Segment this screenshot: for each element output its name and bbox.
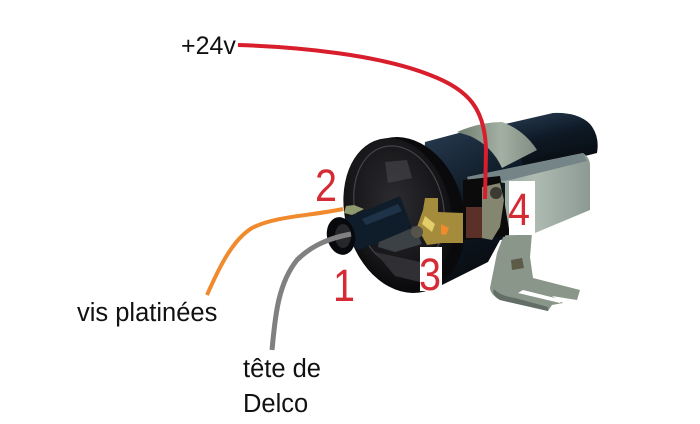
wire: +24v red bbox=[238, 45, 486, 199]
terminal 3 orange dot bbox=[441, 224, 449, 235]
terminal 2 lug bbox=[344, 205, 364, 215]
coil rear barrel bbox=[505, 113, 598, 170]
brown terminal block bbox=[466, 207, 483, 238]
coil main body bbox=[415, 130, 535, 292]
mounting strap bbox=[457, 122, 537, 168]
number 4: 4 bbox=[508, 185, 530, 235]
wire: tete de Delco grey bbox=[272, 234, 351, 350]
bracket foot bbox=[490, 233, 580, 311]
label: tete de Delco: tête de bbox=[243, 355, 321, 383]
terminal 3 brass clip bbox=[417, 198, 463, 245]
number 3: 3 bbox=[419, 250, 441, 300]
number 1: 1 bbox=[333, 261, 355, 311]
terminal 4 clip bbox=[482, 183, 504, 240]
mounting bracket bbox=[467, 153, 590, 238]
icon: ignition coil photo bbox=[323, 113, 598, 311]
label: tete de Delco: Delco bbox=[243, 390, 308, 418]
label background: 3 bbox=[420, 247, 442, 291]
wire: vis platinees orange bbox=[207, 209, 343, 295]
label background: 4 bbox=[509, 181, 535, 235]
label: +24v: +24v bbox=[181, 32, 236, 60]
number 2: 2 bbox=[315, 161, 337, 211]
high-voltage tower bbox=[335, 196, 412, 250]
cap rim bbox=[329, 124, 481, 306]
cap lower lettering bbox=[375, 252, 420, 282]
black cap bbox=[328, 126, 468, 300]
dark cavity bbox=[463, 176, 510, 240]
tower opening bbox=[323, 215, 359, 257]
shadow under tower bbox=[378, 226, 422, 252]
label: vis platinees: vis platinées bbox=[77, 299, 217, 327]
